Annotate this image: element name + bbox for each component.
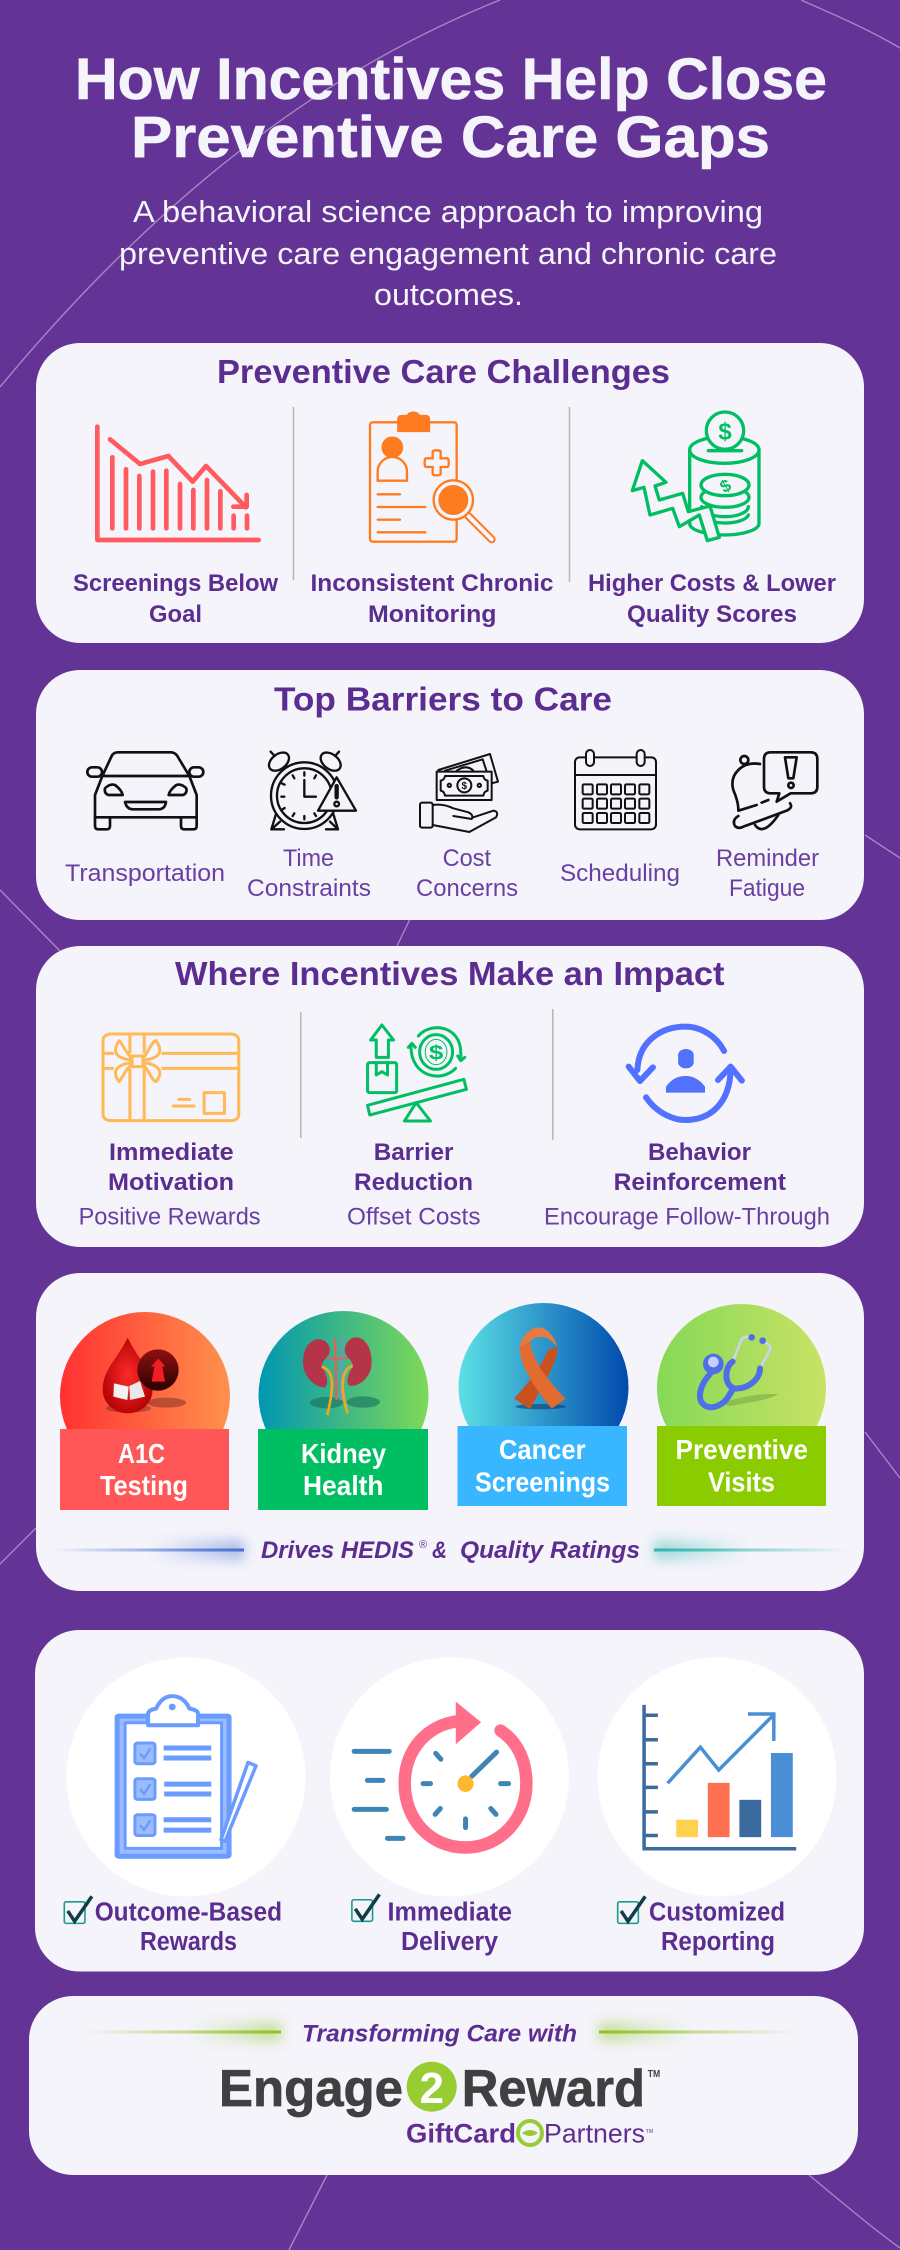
label: higher costs and lower quality scores (588, 570, 836, 628)
caption: drives hedis and quality ratings: ® (419, 1539, 427, 1551)
label: cost concerns: Cost (443, 845, 491, 872)
icon: alarm clock with warning (266, 749, 356, 829)
icon: reporting chart (644, 1705, 796, 1849)
icon: hand holding cash (420, 754, 498, 832)
icon: balance scale with box and coin (368, 1025, 466, 1121)
label: kidney health (301, 1438, 387, 1501)
label: cost concerns: Concerns (416, 875, 518, 902)
label: preventive visits (676, 1434, 808, 1498)
heading: top barriers to care: Top Barriers to Care (274, 682, 612, 718)
icon: check box (352, 1894, 379, 1921)
card: preventive visits (657, 1304, 826, 1506)
label: preventive visits: Visits (708, 1467, 775, 1498)
label: reminder fatigue (716, 845, 819, 902)
icon: clipboard checklist (117, 1696, 256, 1856)
label: a1c testing: Testing (100, 1470, 188, 1501)
glow line: green left (86, 2022, 281, 2042)
heading: preventive care challenges: Preventive Care Challenges (217, 354, 670, 391)
label: transportation: Transportation (65, 860, 225, 887)
label: a1c testing: A1C (118, 1438, 165, 1469)
label: time constraints: Time (283, 845, 334, 872)
label: higher costs and lower quality scores: Quality Scores (627, 601, 797, 628)
icon: declining bar chart (97, 427, 259, 540)
icon: calendar (575, 750, 656, 829)
label: outcome-based rewards: Outcome-Based (95, 1898, 282, 1926)
label: customized reporting: Customized (649, 1898, 785, 1926)
label: a1c testing (100, 1438, 188, 1501)
icon: partner circle (518, 2121, 542, 2145)
label: higher costs and lower quality scores: Higher Costs & Lower (588, 570, 836, 597)
label: behavior reinforcement: Behavior (648, 1139, 751, 1166)
label: cancer screenings: Cancer (499, 1434, 586, 1465)
label: behavior reinforcement: Reinforcement (614, 1169, 786, 1196)
card: kidney health (258, 1311, 428, 1510)
label: customized reporting (618, 1896, 785, 1956)
label: inconsistent chronic monitoring: Inconsistent Chronic (310, 570, 554, 597)
label: time constraints (247, 845, 371, 902)
panel: screening measures (36, 1273, 864, 1591)
label: outcome-based rewards: Rewards (140, 1928, 237, 1956)
divider lines (294, 407, 570, 582)
divider lines (301, 1009, 553, 1140)
subtitle: outcomes. (374, 278, 523, 312)
icon: blood drop with arrow (103, 1338, 186, 1413)
label: preventive visits: Preventive (676, 1434, 808, 1465)
logo: giftcard partners: Partners (544, 2119, 645, 2149)
label: cancer screenings (475, 1434, 610, 1498)
logo: engage2reward (219, 2060, 660, 2118)
label: immediate delivery: Delivery (401, 1928, 499, 1956)
caption: transforming care with: Transforming Care with (302, 2020, 577, 2048)
label: behavior reinforcement (544, 1139, 830, 1230)
panel: transforming care footer (29, 1996, 858, 2175)
subtitle: preventive care engagement and chronic care (119, 237, 777, 271)
card: cancer screenings (458, 1303, 628, 1506)
subtitle: A behavioral science approach to improving (133, 195, 763, 229)
glow line: blue (52, 1540, 244, 1560)
logo: engage2reward: TM (648, 2069, 660, 2080)
icon: bell with alert bubble (732, 752, 817, 829)
panel: program features (35, 1630, 864, 1972)
label: kidney health: Kidney (301, 1438, 387, 1469)
card: a1c testing (60, 1312, 230, 1510)
label: kidney health: Health (303, 1470, 384, 1501)
icon: check box (64, 1896, 92, 1923)
icon: hand holding cash: $ (462, 781, 468, 792)
logo: engage2reward: Reward (462, 2060, 645, 2118)
subtitle (119, 195, 777, 312)
logo: giftcard partners (406, 2119, 653, 2149)
icon: person in reinforcement cycle (629, 1027, 742, 1120)
panel: top barriers to care (36, 670, 864, 920)
label: cost concerns (416, 845, 518, 902)
label: inconsistent chronic monitoring: Monitoring (368, 601, 496, 628)
label: cancer screenings: Screenings (475, 1467, 610, 1498)
label: screenings below goal: Goal (149, 601, 202, 628)
label: time constraints: Constraints (247, 875, 371, 902)
label: immediate motivation: Motivation (108, 1169, 234, 1196)
panel: preventive care challenges (36, 343, 864, 643)
caption: drives hedis and quality ratings (261, 1537, 640, 1564)
icon: stethoscope (700, 1334, 778, 1407)
icon: coins and rising arrow: $ (718, 418, 732, 445)
title (75, 47, 827, 170)
white circles (66, 1658, 836, 1896)
icon: awareness ribbon (514, 1327, 566, 1409)
label: immediate motivation (79, 1139, 261, 1230)
title: How Incentives Help Close (75, 47, 827, 112)
label: reminder fatigue: Fatigue (729, 875, 805, 902)
label: immediate motivation: Positive Rewards (79, 1204, 261, 1230)
label: inconsistent chronic monitoring (310, 570, 554, 628)
label: outcome-based rewards (64, 1896, 282, 1956)
logo: giftcard partners: TM (646, 2129, 653, 2135)
label: behavior reinforcement: Encourage Follow-Through (544, 1204, 830, 1230)
caption: drives hedis and quality ratings: & (432, 1537, 447, 1564)
title: Preventive Care Gaps (131, 105, 770, 170)
label: customized reporting: Reporting (661, 1928, 775, 1956)
glow line: teal (654, 1540, 850, 1560)
logo: engage2reward: Engage (219, 2060, 403, 2118)
label: barrier reduction (347, 1139, 480, 1230)
panel: where incentives make an impact (36, 946, 864, 1247)
icon: kidneys (303, 1336, 380, 1415)
icon: gift card (103, 1034, 239, 1121)
icon: fast clock (354, 1702, 526, 1848)
logo: engage2reward: 2 (419, 2064, 444, 2113)
label: screenings below goal (73, 570, 279, 628)
caption: drives hedis and quality ratings: Drives HEDIS (261, 1537, 414, 1564)
label: barrier reduction: Reduction (354, 1169, 473, 1196)
label: immediate delivery: Immediate (388, 1898, 512, 1926)
logo: giftcard partners: GiftCard (406, 2119, 516, 2149)
icon: clipboard with magnifier (370, 413, 492, 542)
label: immediate delivery (352, 1894, 512, 1956)
icon: car (87, 752, 203, 829)
heading: where incentives make an impact: Where Incentives Make an Impact (175, 956, 724, 993)
label: immediate motivation: Immediate (109, 1139, 234, 1166)
icon: balance scale with box and coin: $ (429, 1041, 443, 1064)
icon: check box (618, 1896, 645, 1923)
label: barrier reduction: Offset Costs (347, 1204, 480, 1230)
label: screenings below goal: Screenings Below (73, 570, 279, 597)
label: reminder fatigue: Reminder (716, 845, 819, 872)
caption: drives hedis and quality ratings: Quality Ratings (460, 1537, 640, 1564)
icon: coins and rising arrow: $ (716, 475, 735, 497)
icon: coins and rising arrow (632, 412, 759, 541)
glow line: green right (599, 2022, 795, 2042)
label: barrier reduction: Barrier (374, 1139, 454, 1166)
label: scheduling: Scheduling (560, 860, 680, 887)
